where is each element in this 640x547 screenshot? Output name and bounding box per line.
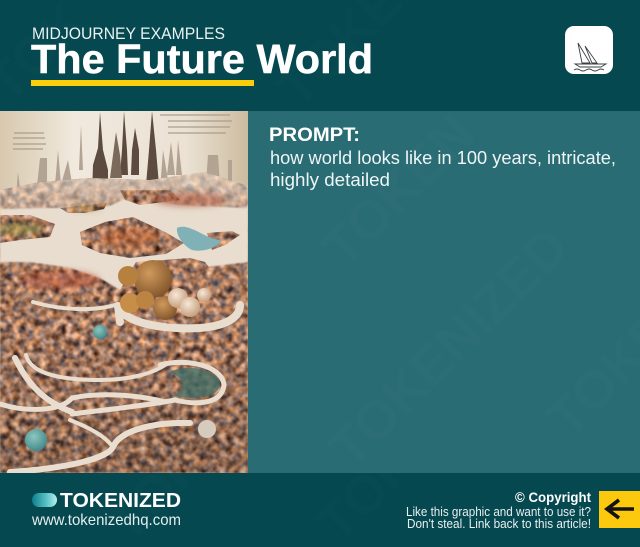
website: www.tokenizedhq.com bbox=[31, 512, 181, 529]
prompt text bbox=[270, 148, 616, 190]
footer bbox=[31, 489, 640, 531]
header title block bbox=[31, 24, 373, 86]
logo bbox=[32, 490, 181, 512]
title underline bbox=[31, 80, 254, 86]
lower terrace rims bbox=[0, 302, 240, 472]
spheres bbox=[25, 260, 216, 451]
central brown sphere bbox=[134, 260, 172, 298]
eyebrow heading: MIDJOURNEY EXAMPLES bbox=[32, 24, 225, 43]
island colour tints bbox=[0, 193, 226, 290]
terrace islands bbox=[0, 190, 240, 300]
prompt text: highly detailed bbox=[270, 170, 390, 190]
lake bbox=[177, 227, 222, 251]
lower lake bbox=[170, 368, 220, 398]
copyright line 1: Like this graphic and want to use it? bbox=[406, 505, 591, 519]
small brown domes bbox=[118, 266, 138, 286]
panel watermark: TOKEN bbox=[311, 103, 486, 278]
spires bbox=[92, 112, 158, 180]
panel watermark: TOKENIZED bbox=[318, 216, 580, 478]
copyright line 2: Don't steal. Link back to this article! bbox=[407, 517, 591, 531]
faint caption text marks bbox=[13, 114, 232, 150]
panel watermark bbox=[311, 103, 640, 478]
upper white terraces bbox=[0, 196, 248, 290]
pale wash over upper city bbox=[0, 172, 248, 270]
logo mark bbox=[32, 493, 57, 507]
illustration: future world city bbox=[0, 111, 248, 473]
shadow over lower city bbox=[0, 356, 248, 473]
copyright note bbox=[406, 489, 591, 531]
dense city base texture bbox=[0, 172, 248, 473]
icon: yellow arrow box bbox=[599, 491, 640, 528]
panel: prompt bbox=[248, 103, 640, 478]
sky bbox=[0, 111, 248, 473]
prompt label: PROMPT: bbox=[269, 124, 360, 146]
copyright heading: © Copyright bbox=[515, 489, 591, 505]
main title: The Future World bbox=[31, 36, 373, 82]
teal spheres bbox=[93, 325, 107, 339]
prompt text: how world looks like in 100 years, intricate, bbox=[270, 148, 616, 168]
distant towers bbox=[16, 126, 232, 186]
white domes bbox=[168, 288, 188, 308]
logo wordmark: TOKENIZED bbox=[60, 490, 181, 512]
island texture bbox=[0, 190, 240, 300]
icon: Midjourney sailboat bbox=[565, 26, 613, 74]
watermark pattern: TOKENIZED bbox=[306, 291, 568, 547]
